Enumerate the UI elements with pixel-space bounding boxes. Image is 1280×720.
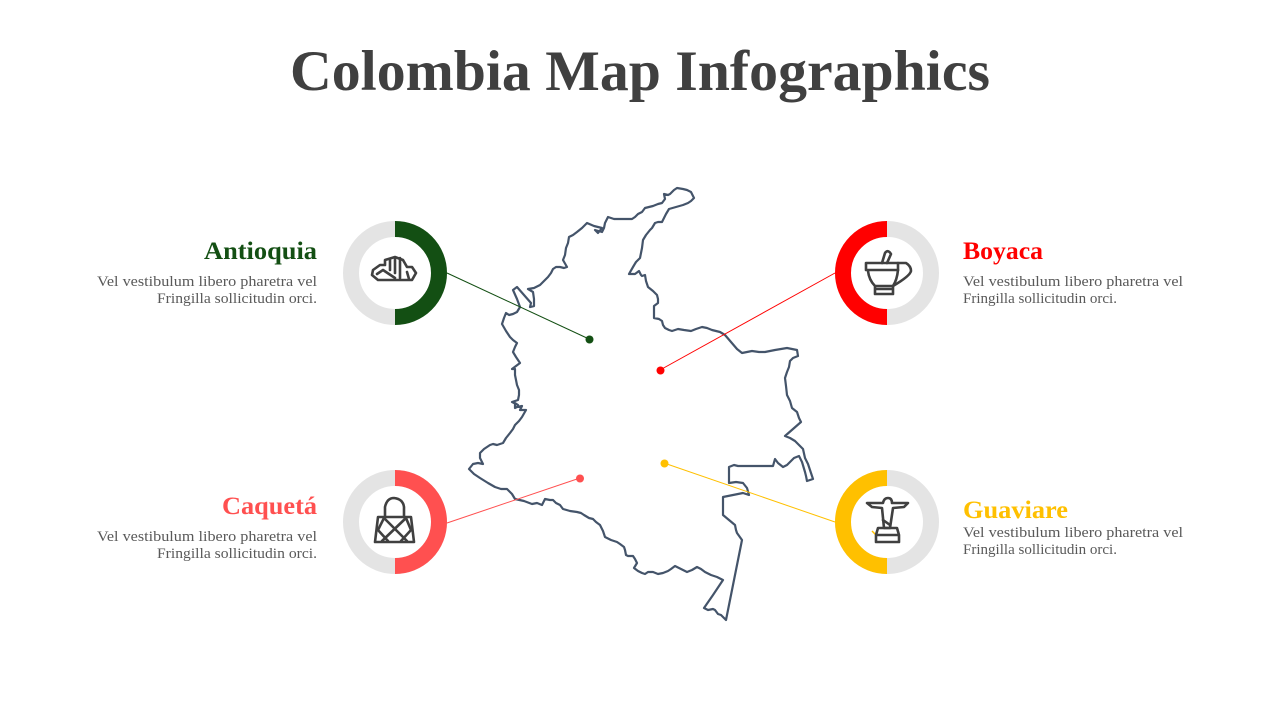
- text block: Guaviare: Fringilla sollicitudin orci.: [963, 542, 1117, 558]
- heading: Caqueta: Caquetá: [222, 493, 318, 520]
- text block: Caqueta: Vel vestibulum libero pharetra vel: [97, 529, 317, 545]
- panel: Antioquia: [97, 229, 439, 317]
- panel: Boyaca: [843, 229, 1183, 317]
- leader line and dot: Boyaca: [656, 273, 835, 374]
- leader line and dot: Caqueta: [447, 474, 584, 523]
- map: Colombia outline: [469, 188, 813, 620]
- ring: Caqueta: [351, 478, 439, 566]
- icon: hat: [372, 257, 416, 280]
- text block: Boyaca: [963, 274, 1183, 307]
- text block: Guaviare: Vel vestibulum libero pharetra vel: [963, 525, 1183, 541]
- leader line and dot: Antioquia: [447, 273, 594, 344]
- text block: Boyaca: Vel vestibulum libero pharetra vel: [963, 274, 1183, 290]
- text block: Antioquia: Fringilla sollicitudin orci.: [157, 291, 317, 307]
- heading: Guaviare: Guaviare: [963, 497, 1068, 524]
- text block: Antioquia: Vel vestibulum libero pharetra vel: [97, 274, 317, 290]
- ring: Boyaca: [843, 229, 931, 317]
- icon: mortar and cup: [866, 251, 911, 294]
- heading: Boyaca: Boyaca: [963, 238, 1044, 265]
- ring: Antioquia: [351, 229, 439, 317]
- panel: Guaviare: [843, 478, 1183, 566]
- heading: Antioquia: Antioquia: [204, 238, 318, 265]
- text block: Antioquia: [97, 274, 317, 307]
- ring: Guaviare: [843, 478, 931, 566]
- text block: Guaviare: [963, 525, 1183, 558]
- leader line and dot: Guaviare: [660, 460, 835, 522]
- text block: Caqueta: [97, 529, 317, 562]
- text block: Caqueta: Fringilla sollicitudin orci.: [157, 546, 317, 562]
- title: Colombia Map Infographics: [290, 40, 990, 103]
- line fragment: Guaviare: [872, 531, 876, 535]
- text block: Boyaca: Fringilla sollicitudin orci.: [963, 291, 1117, 307]
- icon: woven bag: [375, 498, 414, 542]
- panel: Caqueta: [97, 478, 439, 566]
- icon: Christ statue: [867, 498, 908, 542]
